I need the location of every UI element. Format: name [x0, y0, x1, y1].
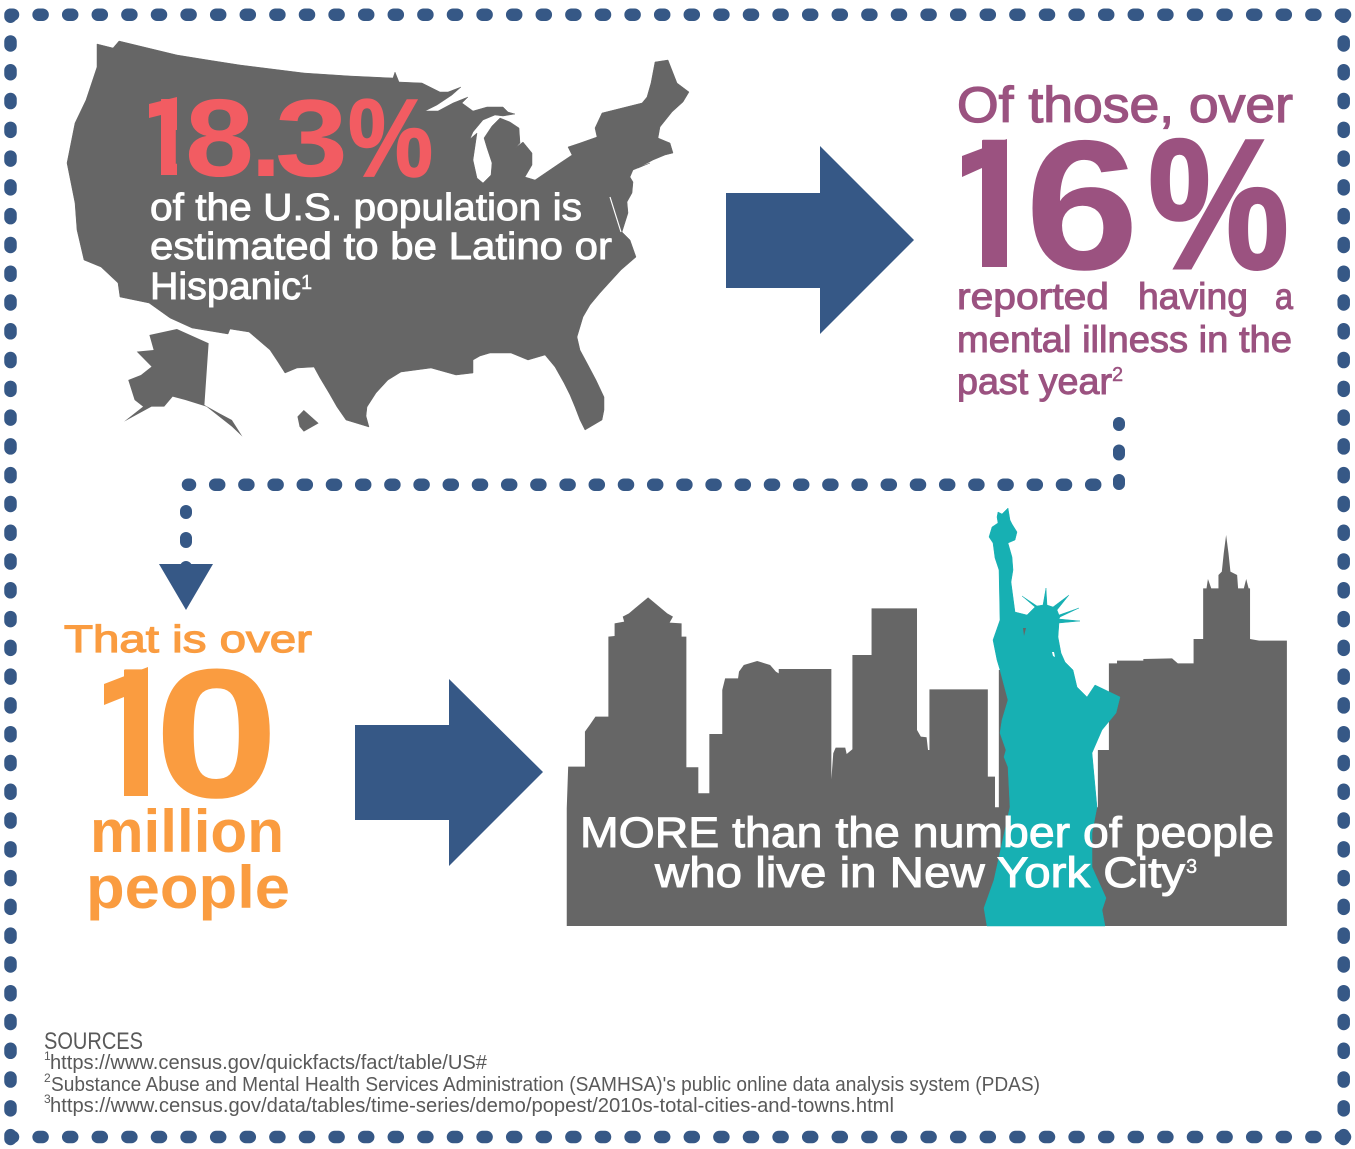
text: share of U.S. population: estimated to be Latino or — [150, 226, 612, 268]
statistic: 10: 0 — [154, 630, 279, 836]
sources: 2 — [44, 1071, 51, 1085]
statistic: 18.3% — [149, 97, 432, 178]
text: share of U.S. population: Hispanic — [150, 266, 301, 308]
arrow: 10 million to New York — [355, 679, 543, 866]
sources: 3 — [44, 1092, 51, 1106]
statistic: 16% — [962, 138, 1286, 271]
statistic: 18.3%: 1 — [135, 76, 196, 199]
text: million people: million — [90, 798, 284, 865]
text: more than the number of people in New York City — [580, 809, 1274, 897]
text: reported mental illness: 2 — [1112, 364, 1123, 386]
text: reported mental illness: mental illness in the — [957, 319, 1292, 360]
statistic: 16%: 6 — [1025, 103, 1139, 309]
statistic: 18.3%: 3 — [275, 77, 348, 200]
sources — [44, 1028, 1040, 1117]
text: million people: people — [86, 854, 290, 921]
sources: Substance Abuse and Mental Health Services Administration (SAMHSA)'s public online data analysis system (PDAS) — [51, 1074, 1040, 1096]
text: reported mental illness: past year — [957, 361, 1112, 402]
statistic: 10 — [104, 667, 270, 799]
text: reported mental illness: having — [1138, 276, 1248, 317]
map of the United States with Alaska and Hawaii — [67, 41, 689, 437]
New York City skyline — [567, 535, 1287, 926]
heading: Of those, over: Of those, over — [957, 77, 1293, 133]
statistic: 18.3%: 8 — [185, 77, 254, 200]
text: more than the number of people in New York City: who live in New York City — [654, 849, 1186, 897]
sources: SOURCES — [44, 1028, 143, 1055]
text: reported mental illness — [957, 276, 1293, 402]
statistic: 10: 1 — [81, 629, 183, 835]
text: million people — [86, 798, 290, 921]
statistic: 18.3%: % — [348, 77, 433, 200]
statistic: 16%: % — [1148, 102, 1289, 308]
dotted connector with down arrow — [159, 423, 1119, 610]
text: reported mental illness: a — [1275, 276, 1293, 317]
sources: 1 — [44, 1049, 51, 1063]
text: share of U.S. population: 1 — [301, 272, 312, 294]
text: more than the number of people in New York City: MORE than the number of people — [580, 809, 1274, 857]
text: share of U.S. population — [150, 187, 612, 308]
sources: https://www.census.gov/quickfacts/fact/table/US# — [50, 1052, 488, 1074]
Statue of Liberty silhouette — [984, 508, 1120, 926]
text: share of U.S. population: of the U.S. population is — [150, 187, 582, 229]
text: more than the number of people in New York City: 3 — [1186, 856, 1197, 878]
statistic: 18.3%: . — [251, 77, 281, 200]
statistic: 16%: 1 — [938, 101, 1041, 307]
sources: https://www.census.gov/data/tables/time-series/demo/popest/2010s-total-cities-and-towns.html — [50, 1095, 894, 1117]
text: That is over: That is over — [64, 619, 312, 661]
text: reported mental illness: reported — [957, 276, 1109, 317]
arrow: map to 16 percent — [726, 146, 914, 334]
